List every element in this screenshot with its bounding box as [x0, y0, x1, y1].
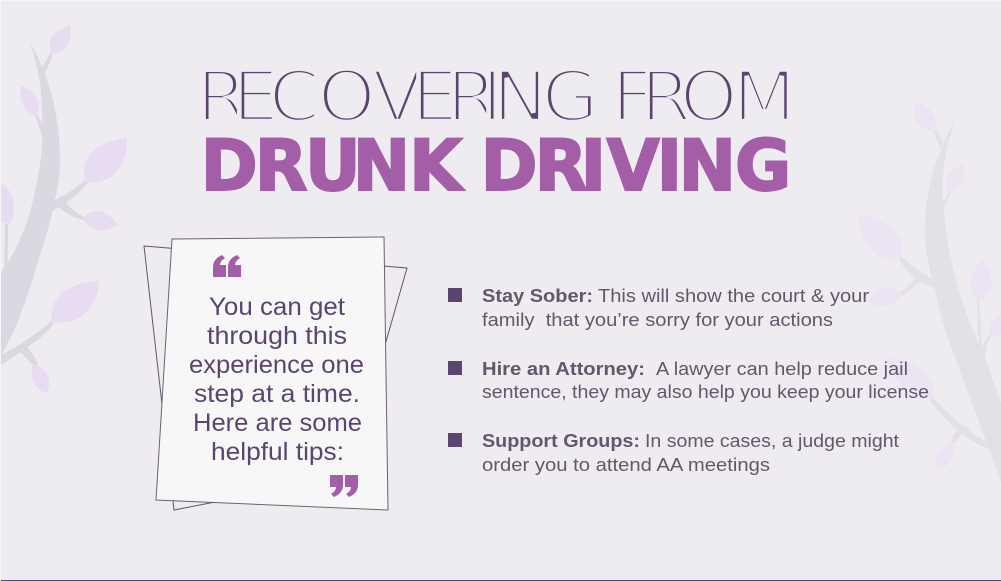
title — [196, 57, 796, 207]
tip 2: hire an attorney — [448, 358, 929, 402]
quote text: Here are some — [193, 409, 362, 437]
right tree trunk and branches — [899, 120, 1001, 482]
tip 3: support groups — [448, 430, 899, 475]
tip 3: support groups: Support Groups: — [482, 430, 640, 451]
right tree leaves — [858, 102, 1001, 471]
quote text — [189, 293, 364, 466]
quote text: step at a time. — [194, 380, 360, 408]
tip 1: stay sober: This will show the court & your — [598, 285, 869, 306]
tip 2: hire an attorney: Hire an Attorney: — [482, 358, 645, 379]
right tree illustration — [858, 102, 1001, 482]
quote text: through this — [207, 322, 347, 350]
tip 2: hire an attorney: sentence, they may also help you keep your license — [482, 381, 929, 402]
tip 3: support groups: order you to attend AA meetings — [482, 454, 770, 475]
left tree illustration — [1, 25, 127, 393]
quote text: experience one — [189, 351, 364, 379]
tip 1: stay sober: family that you’re sorry for your actions — [482, 309, 833, 330]
note card — [144, 237, 407, 510]
quote text: helpful tips: — [211, 438, 344, 466]
front sheet of paper — [156, 237, 388, 510]
tip 1: stay sober: Stay Sober: — [482, 285, 593, 306]
icon: closing quotation mark — [330, 475, 358, 497]
tip 1: stay sober — [448, 285, 869, 330]
icon: opening quotation mark — [213, 255, 241, 277]
tip 3: support groups: In some cases, a judge might — [645, 430, 899, 451]
left tree trunk and branches — [1, 43, 88, 366]
back sheet of paper — [144, 246, 407, 510]
quote text: You can get — [209, 293, 345, 321]
title line 2: drunk driving: DRUNK DRIVING — [201, 126, 791, 207]
tip 2: hire an attorney: A lawyer can help reduce jail — [656, 358, 908, 379]
tips list — [448, 285, 929, 475]
left tree leaves — [1, 25, 127, 393]
title line 1: recovering from: RECOVERING FROM — [196, 57, 796, 138]
